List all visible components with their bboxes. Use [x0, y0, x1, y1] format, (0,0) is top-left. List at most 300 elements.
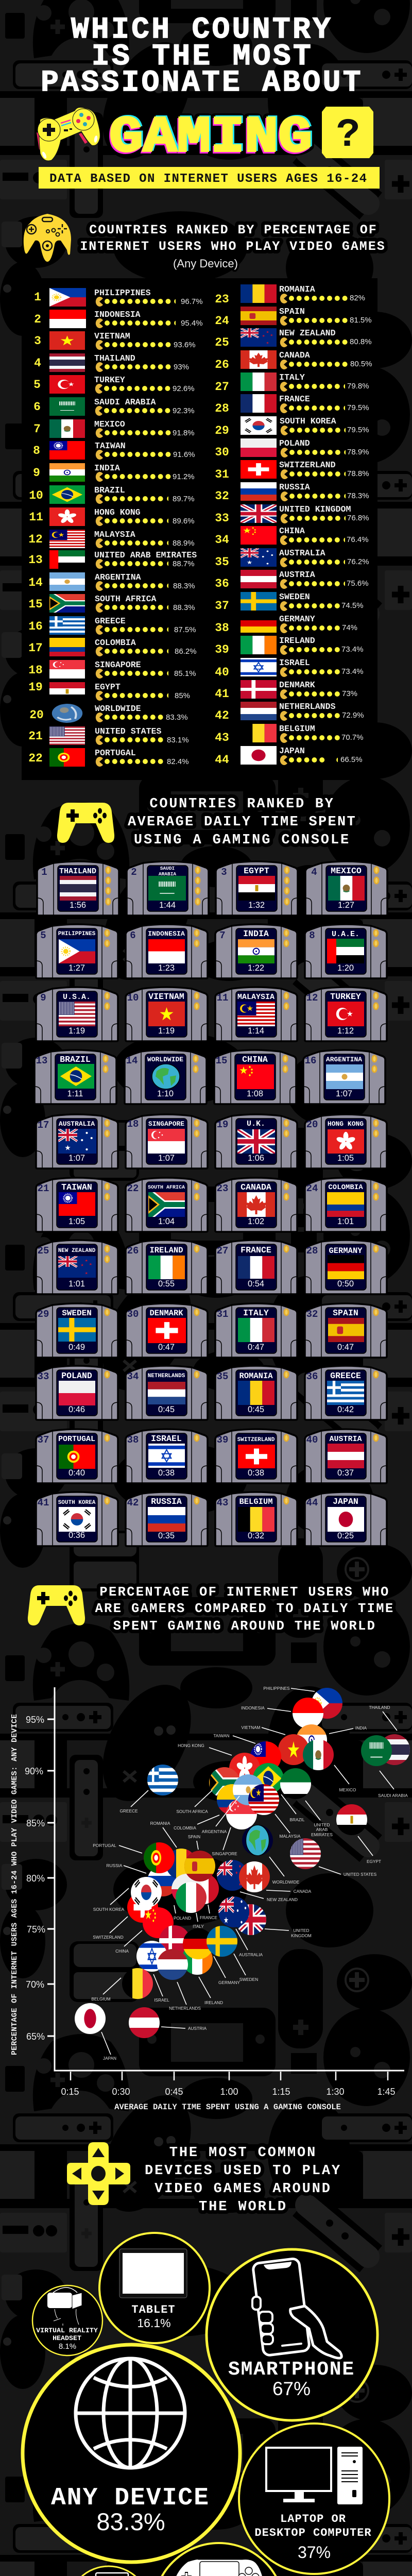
- country labels: SAUDI ARABIA: [378, 1793, 408, 1798]
- row 12 Malaysia: 12: [28, 533, 43, 546]
- row 21 United States: 21: [28, 730, 43, 743]
- cartridge 25 New Zealand: NEW ZEALAND: [58, 1248, 96, 1254]
- cartridge 17 Australia: AUSTRALIA: [59, 1120, 95, 1128]
- row 14 Argentina: ARGENTINA: [95, 572, 141, 582]
- cartridge 26 Ireland: IRELAND: [149, 1246, 183, 1255]
- title: WHICH COUNTRY: [71, 13, 333, 47]
- cartridge 9 U.S.A.: [36, 987, 118, 1041]
- row 42 Netherlands: 72.9%: [342, 711, 364, 720]
- row 22 Portugal: 22: [28, 752, 43, 765]
- row 9 India: [33, 463, 195, 482]
- row 4 Thailand: [34, 353, 189, 372]
- cartridge 23 Canada: [215, 1178, 297, 1232]
- row 19 Egypt: [28, 681, 190, 701]
- cartridge 43 Belgium: BELGIUM: [239, 1497, 273, 1506]
- cartridge 2 Saudi Arabia: 1:44: [159, 901, 176, 910]
- cartridge 10 Vietnam: [126, 987, 208, 1041]
- heading: most common devices: THE WORLD: [199, 2199, 287, 2215]
- cartridge 35 Romania: ROMANIA: [239, 1371, 273, 1381]
- row 14 Argentina: 14: [28, 576, 43, 589]
- row 42 Netherlands: 42: [215, 709, 229, 722]
- x axis ticks and labels: [61, 2072, 396, 2097]
- country labels: SWITZERLAND: [93, 1935, 124, 1940]
- cartridge 29 Sweden: [36, 1303, 118, 1358]
- cartridge 40 Austria: 0:37: [337, 1468, 354, 1478]
- bubble: VR headset: VIRTUAL REALITY: [36, 2327, 98, 2334]
- country labels: SWEDEN: [239, 1977, 258, 1982]
- row 40 Israel: ISRAEL: [279, 658, 310, 668]
- cartridge 4 Mexico: 4: [311, 867, 317, 878]
- banner: data based on internet users: DATA BASED ON INTERNET USERS AGES 16-24: [49, 172, 367, 186]
- bubble: any device: [23, 2345, 240, 2562]
- bubble: laptop or desktop computer: 37%: [298, 2543, 331, 2562]
- row 43 Belgium: 43: [215, 731, 229, 744]
- row 11 Hong Kong: 89.6%: [173, 517, 195, 526]
- cartridge 34 Netherlands: [126, 1366, 208, 1420]
- cartridge 13 Brazil: BRAZIL: [60, 1055, 91, 1064]
- cartridge 19 U.K.: U.K.: [247, 1120, 265, 1128]
- cartridge 42 Russia: 42: [127, 1497, 139, 1509]
- row 5 Turkey: 92.6%: [173, 384, 195, 393]
- row 11 Hong Kong: HONG KONG: [94, 507, 141, 517]
- x axis title: AVERAGE DAILY TIME SPENT USING A GAMING CONSOLE: [114, 2103, 341, 2112]
- word: GAMING: GAMING: [109, 109, 312, 166]
- row 3 Vietnam: 3: [34, 334, 41, 348]
- cartridge 6 Indonesia: 1:23: [158, 963, 175, 973]
- row 19 Egypt: EGYPT: [95, 682, 121, 692]
- title: IS THE MOST: [92, 40, 313, 74]
- cartridge 38 Israel: [126, 1429, 208, 1483]
- country labels: VIETNAM: [242, 1725, 261, 1730]
- row 31 Switzerland: 31: [215, 468, 229, 481]
- row 35 Australia: [215, 548, 369, 569]
- row 38 Germany: 38: [215, 621, 229, 635]
- cartridge 30 Denmark: [126, 1303, 208, 1358]
- row 30 Poland: 78.9%: [347, 448, 369, 456]
- row 1 Philippines: PHILIPPINES: [94, 288, 151, 298]
- country labels: HONG KONG: [178, 1743, 204, 1748]
- country labels: ROMANIA: [150, 1821, 170, 1826]
- country labels: THAILAND: [369, 1705, 390, 1710]
- cartridge 24 Colombia: 1:01: [337, 1217, 354, 1226]
- cartridge 12 Turkey: 12: [306, 992, 318, 1004]
- row 41 Denmark: 73%: [342, 689, 357, 698]
- cartridge 20 Hong Kong: HONG KONG: [328, 1120, 364, 1128]
- country labels: INDONESIA: [241, 1705, 265, 1710]
- row 17 Colombia: 86.2%: [175, 647, 197, 656]
- cartridge 38 Israel: 0:38: [158, 1468, 175, 1478]
- bubble: smartphone: 67%: [272, 2378, 311, 2399]
- row 16 Greece: [28, 616, 196, 635]
- row 43 Belgium: BELGIUM: [279, 724, 315, 734]
- bubble leader lines: [101, 1688, 397, 2055]
- heading: countries ranked by percentage: INTERNET USERS WHO PLAY VIDEO GAMES: [80, 239, 386, 254]
- cartridge 35 Romania: [215, 1366, 297, 1420]
- bubble: any device: 83.3%: [96, 2508, 165, 2535]
- cartridge 2 Saudi Arabia: 2: [131, 867, 137, 878]
- row 20 Worldwide: 83.3%: [166, 713, 188, 722]
- cartridge 44 Japan: JAPAN: [333, 1497, 358, 1506]
- cartridge 2 Saudi Arabia: ARABIA: [159, 871, 176, 877]
- row 44 Japan: 44: [215, 753, 229, 767]
- x axis ticks and labels: 1:00: [220, 2087, 238, 2097]
- y axis with ticks and labels: 70%: [26, 1979, 44, 1990]
- y axis with ticks and labels: 80%: [26, 1873, 45, 1884]
- country labels: [91, 1686, 408, 2061]
- cartridge 13 Brazil: 1:11: [67, 1089, 83, 1098]
- cartridge 32 Spain: SPAIN: [333, 1308, 358, 1318]
- row 25 New Zealand: 25: [215, 336, 229, 349]
- row 14 Argentina: [28, 572, 195, 591]
- heading: most common devices: [145, 2145, 341, 2215]
- row 10 Brazil: BRAZIL: [94, 485, 125, 495]
- bubble: gaming console: [153, 2543, 284, 2576]
- country labels: MEXICO: [339, 1787, 356, 1792]
- row 30 Poland: POLAND: [279, 438, 310, 448]
- cartridge 21 Taiwan: 1:05: [68, 1217, 85, 1226]
- country labels: KINGDOM: [291, 1933, 312, 1938]
- row 29 South Korea: 79.5%: [347, 426, 369, 434]
- cartridge 1 Thailand: 1: [41, 867, 47, 878]
- cartridge 41 South Korea: 41: [38, 1497, 49, 1509]
- cartridge 14 Worldwide: 14: [126, 1055, 138, 1066]
- cartridge 37 Portugal: 0:40: [68, 1468, 85, 1478]
- cartridge 22 South Africa: [126, 1178, 208, 1232]
- row 44 Japan: JAPAN: [279, 746, 305, 756]
- cartridge 5 Philippines: [36, 924, 118, 978]
- cartridge 28 Germany: 28: [306, 1245, 318, 1257]
- row 15 South Africa: [28, 594, 195, 613]
- row 9 India: 91.2%: [173, 472, 195, 481]
- cartridge 29 Sweden: 29: [38, 1309, 49, 1320]
- cartridge 23 Canada: CANADA: [241, 1182, 271, 1192]
- cartridge 11 Malaysia: 1:14: [248, 1026, 264, 1036]
- cartridge 3 Egypt: 3: [221, 867, 227, 878]
- row 4 Thailand: 93%: [174, 363, 189, 371]
- cartridge 38 Israel: 38: [127, 1434, 139, 1446]
- y axis with ticks and labels: 75%: [27, 1924, 45, 1935]
- row 19 Egypt: 85%: [175, 691, 190, 700]
- country labels: ARAB: [316, 1827, 328, 1832]
- row 18 Singapore: 85.1%: [174, 669, 196, 678]
- row 31 Switzerland: SWITZERLAND: [279, 460, 336, 470]
- cartridge 14 Worldwide: [125, 1050, 207, 1104]
- row 8 Taiwan: [33, 441, 195, 460]
- cartridge 28 Germany: GERMANY: [329, 1246, 363, 1256]
- cartridge 44 Japan: 44: [306, 1497, 318, 1509]
- cartridge 26 Ireland: 0:55: [158, 1279, 175, 1289]
- row 3 Vietnam: VIETNAM: [94, 331, 130, 341]
- cartridge 39 Switzerland: [215, 1429, 297, 1483]
- country labels: AUSTRIA: [188, 2026, 207, 2031]
- country labels: NEW ZEALAND: [267, 1897, 298, 1902]
- row 21 United States: 83.1%: [167, 736, 189, 744]
- row 28 France: FRANCE: [279, 394, 310, 404]
- country labels: IRELAND: [204, 2000, 223, 2005]
- country labels: MALAYSIA: [280, 1834, 301, 1839]
- heading: ranked by average daily time: AVERAGE DAILY TIME SPENT: [128, 815, 356, 830]
- cartridge 25 New Zealand: 1:01: [68, 1279, 85, 1289]
- row 32 Russia: [215, 482, 369, 503]
- row 38 Germany: GERMANY: [279, 614, 315, 624]
- cartridge 3 Egypt: 1:32: [248, 901, 265, 910]
- bubble: media streaming service: [68, 2566, 149, 2576]
- row 10 Brazil: 10: [29, 489, 43, 502]
- country labels: SINGAPORE: [212, 1851, 237, 1856]
- row 6 Saudi Arabia: [33, 397, 195, 416]
- row 26 Canada: CANADA: [279, 350, 310, 360]
- cartridge 40 Austria: [305, 1429, 387, 1483]
- row 13 UAE: 13: [28, 553, 43, 567]
- row 26 Canada: 26: [215, 358, 229, 371]
- row 5 Turkey: [33, 375, 195, 394]
- flag bubbles: [75, 1688, 410, 2038]
- cartridge 17 Australia: 1:07: [68, 1154, 85, 1163]
- cartridge 23 Canada: 1:02: [248, 1217, 264, 1226]
- cartridge 31 Italy: [215, 1303, 297, 1358]
- row 8 Taiwan: 8: [33, 444, 40, 457]
- cartridge 14 Worldwide: WORLDWIDE: [147, 1056, 183, 1063]
- cartridge 24 Colombia: [305, 1178, 387, 1232]
- title: [41, 13, 363, 100]
- cartridge 34 Netherlands: 0:45: [158, 1405, 175, 1414]
- heading: ranked by average daily time: [128, 796, 356, 848]
- row 36 Austria: 36: [215, 577, 229, 590]
- y axis with ticks and labels: 85%: [26, 1818, 45, 1828]
- row 34 China: CHINA: [279, 526, 305, 536]
- question mark box: [322, 107, 373, 158]
- cartridge 14 Worldwide: 1:10: [157, 1089, 174, 1098]
- row 8 Taiwan: 91.6%: [173, 450, 195, 459]
- row 36 Austria: AUSTRIA: [279, 570, 315, 580]
- country labels: ISRAEL: [154, 1997, 169, 2003]
- row 24 Spain: 81.5%: [350, 316, 372, 325]
- row 2 Indonesia: 95.4%: [181, 319, 203, 328]
- cartridge 5 Philippines: 1:27: [68, 963, 85, 973]
- row 26 Canada: 80.5%: [350, 360, 372, 368]
- row 12 Malaysia: 88.9%: [173, 539, 195, 548]
- cartridge 34 Netherlands: 34: [127, 1371, 139, 1382]
- row 29 South Korea: 29: [215, 424, 229, 437]
- cartridge 33 Poland: 0:46: [68, 1405, 85, 1414]
- cartridge 15 China: 15: [216, 1055, 227, 1066]
- row 35 Australia: 76.2%: [347, 557, 369, 566]
- cartridge 42 Russia: [126, 1492, 208, 1546]
- scatter chart: gamers vs daily time: [10, 1686, 410, 2112]
- cartridge 11 Malaysia: 11: [217, 992, 228, 1004]
- cartridge 9 U.S.A.: 9: [40, 992, 46, 1004]
- row 20 Worldwide: [29, 704, 188, 723]
- cartridge 41 South Korea: 0:36: [68, 1531, 85, 1540]
- bubble: VR headset: [32, 2285, 102, 2355]
- cartridge 17 Australia: [36, 1114, 118, 1168]
- country labels: SPAIN: [188, 1834, 200, 1839]
- x axis ticks and labels: 0:45: [165, 2087, 183, 2097]
- row 27 Italy: 79.8%: [347, 382, 369, 391]
- cartridge 13 Brazil: [35, 1050, 116, 1104]
- row 17 Colombia: COLOMBIA: [95, 638, 136, 648]
- row 16 Greece: GREECE: [95, 616, 126, 626]
- row 33 United Kingdom: 33: [215, 512, 229, 525]
- heading: ranked by average daily time: COUNTRIES RANKED BY: [149, 796, 335, 812]
- cartridge 1 Thailand: [37, 861, 119, 916]
- row 24 Spain: 24: [215, 314, 229, 328]
- cartridge 19 U.K.: 19: [217, 1119, 228, 1130]
- bubble: tablet: TABLET: [131, 2303, 176, 2316]
- row 17 Colombia: [28, 638, 197, 656]
- cartridge 20 Hong Kong: [305, 1114, 387, 1168]
- row 33 United Kingdom: 76.8%: [347, 514, 369, 522]
- row 33 United Kingdom: UNITED KINGDOM: [279, 504, 351, 514]
- country labels: POLAND: [174, 1916, 191, 1921]
- country labels: UNITED: [314, 1822, 330, 1827]
- cartridge 8 U.A.E.: U.A.E.: [332, 930, 359, 939]
- cartridge 41 South Korea: SOUTH KOREA: [58, 1500, 96, 1506]
- cartridge 30 Denmark: 30: [127, 1309, 139, 1320]
- row 39 Ireland: 73.4%: [341, 645, 364, 654]
- country labels: ITALY: [193, 1924, 204, 1929]
- heading: countries ranked by percentage: (Any Device): [173, 257, 238, 270]
- cartridge 30 Denmark: 0:47: [158, 1343, 175, 1352]
- country labels: CANADA: [294, 1889, 312, 1894]
- cartridge 6 Indonesia: INDONESIA: [148, 930, 185, 938]
- cartridge 7 India: INDIA: [243, 929, 269, 939]
- country labels: PHILIPPINES: [263, 1686, 290, 1691]
- cartridge 22 South Africa: SOUTH AFRICA: [148, 1185, 185, 1191]
- cartridge 25 New Zealand: [36, 1240, 118, 1294]
- cartridge 31 Italy: ITALY: [243, 1308, 269, 1318]
- icon: yellow gamepad: [57, 803, 114, 843]
- cartridge 15 China: 1:08: [247, 1089, 263, 1098]
- row 12 Malaysia: MALAYSIA: [94, 530, 135, 539]
- row 23 Romania: [215, 284, 365, 306]
- cartridge 12 Turkey: TURKEY: [330, 992, 361, 1002]
- country labels: GREECE: [119, 1808, 138, 1814]
- row 30 Poland: [215, 438, 369, 459]
- y axis with ticks and labels: 65%: [26, 2031, 45, 2042]
- row 20 Worldwide: WORLDWIDE: [95, 704, 141, 714]
- cartridge 22 South Africa: 1:04: [158, 1217, 175, 1226]
- cartridge 5 Philippines: 5: [40, 930, 46, 941]
- country labels: GERMANY: [218, 1980, 240, 1985]
- row 38 Germany: 74%: [342, 623, 357, 632]
- x axis ticks and labels: 0:30: [112, 2087, 130, 2097]
- cartridge 15 China: [214, 1050, 296, 1104]
- cartridge 6 Indonesia: [126, 924, 208, 978]
- row 18 Singapore: SINGAPORE: [95, 660, 141, 670]
- row 1 Philippines: 1: [34, 291, 41, 304]
- row 15 South Africa: SOUTH AFRICA: [95, 594, 157, 604]
- cartridge 32 Spain: 32: [306, 1309, 318, 1320]
- cartridge 8 U.A.E.: [305, 924, 387, 978]
- country labels: TAIWAN: [213, 1733, 230, 1738]
- row 43 Belgium: [215, 724, 364, 744]
- row 22 Portugal: 82.4%: [167, 757, 189, 766]
- cartridge 35 Romania: 35: [217, 1371, 228, 1382]
- cartridge 25 New Zealand: 25: [38, 1245, 49, 1257]
- row 30 Poland: 30: [215, 446, 229, 459]
- row 21 United States: UNITED STATES: [95, 726, 161, 736]
- row 13 UAE: 88.7%: [173, 560, 195, 568]
- row 23 Romania: 23: [215, 293, 229, 306]
- row 37 Sweden: 37: [215, 599, 229, 613]
- cartridge 33 Poland: 33: [38, 1371, 49, 1382]
- row 41 Denmark: DENMARK: [279, 680, 315, 690]
- row 7 Mexico: [33, 419, 195, 438]
- row 10 Brazil: [29, 485, 195, 504]
- cartridge 22 South Africa: 22: [127, 1183, 139, 1194]
- cartridge 7 India: 7: [219, 930, 226, 941]
- row 19 Egypt: 19: [28, 681, 43, 694]
- x axis ticks and labels: 1:30: [326, 2087, 345, 2097]
- row 24 Spain: SPAIN: [279, 307, 305, 316]
- cartridge 42 Russia: 0:35: [158, 1531, 175, 1540]
- row 4 Thailand: THAILAND: [94, 353, 135, 363]
- word: GAMING: GAMING: [109, 109, 312, 166]
- cartridge 20 Hong Kong: 1:05: [337, 1154, 354, 1163]
- bubble: smartphone: SMARTPHONE: [228, 2359, 355, 2381]
- cartridge 2 Saudi Arabia: [127, 861, 209, 916]
- row 3 Vietnam: 93.6%: [174, 341, 196, 349]
- row 1 Philippines: [34, 288, 203, 307]
- cartridge 24 Colombia: COLOMBIA: [328, 1183, 363, 1192]
- row 42 Netherlands: NETHERLANDS: [279, 702, 336, 711]
- heading: most common devices: DEVICES USED TO PLAY: [145, 2163, 341, 2179]
- cartridge 39 Switzerland: 0:38: [248, 1468, 264, 1478]
- country labels: BRAZIL: [289, 1817, 305, 1822]
- cartridge 19 U.K.: 1:06: [248, 1154, 264, 1163]
- row 11 Hong Kong: 11: [29, 511, 43, 524]
- row 36 Austria: 75.6%: [347, 579, 369, 588]
- row 10 Brazil: 89.7%: [173, 495, 195, 503]
- row 28 France: 79.5%: [347, 403, 369, 412]
- y axis title: PERCENTAGE OF INTERNET USERS AGES 16-24 WHO PLAY VIDEO GAMES: ANY DEVICE: [10, 1714, 19, 2055]
- row 7 Mexico: MEXICO: [94, 419, 125, 429]
- country labels: EGYPT: [367, 1859, 381, 1864]
- cartridge 3 Egypt: EGYPT: [244, 866, 269, 876]
- y axis with ticks and labels: [25, 1687, 404, 2071]
- cartridge 20 Hong Kong: 20: [306, 1119, 318, 1130]
- cartridge 9 U.S.A.: U.S.A.: [63, 993, 91, 1002]
- cartridge 10 Vietnam: 10: [127, 992, 139, 1004]
- country labels: NETHERLANDS: [169, 2006, 201, 2011]
- cartridge 18 Singapore: 1:07: [158, 1154, 175, 1163]
- row 1 Philippines: 96.7%: [181, 297, 203, 306]
- cartridge 5 Philippines: PHILIPPINES: [58, 931, 96, 937]
- cartridge 40 Austria: AUSTRIA: [329, 1435, 362, 1444]
- row 2 Indonesia: [34, 310, 203, 328]
- cartridge 23 Canada: 23: [217, 1183, 228, 1194]
- row 29 South Korea: SOUTH KOREA: [280, 416, 336, 426]
- cartridge 41 South Korea: [36, 1492, 118, 1546]
- row 44 Japan: [215, 746, 363, 767]
- cartridge 43 Belgium: 43: [217, 1497, 228, 1509]
- x axis ticks and labels: 1:45: [377, 2087, 396, 2097]
- row 3 Vietnam: [34, 331, 196, 350]
- y axis with ticks and labels: 90%: [25, 1766, 43, 1776]
- x axis ticks and labels: 1:15: [272, 2087, 290, 2097]
- country labels: UNITED STATES: [344, 1872, 377, 1877]
- country labels: JAPAN: [103, 2056, 116, 2061]
- row 9 India: 9: [33, 466, 40, 480]
- row 41 Denmark: 41: [215, 687, 229, 701]
- row 40 Israel: 73.4%: [341, 667, 364, 676]
- row 39 Ireland: 39: [215, 643, 229, 656]
- row 35 Australia: 35: [215, 555, 229, 569]
- cartridge 27 France: 27: [217, 1245, 228, 1257]
- cartridge 9 U.S.A.: 1:19: [68, 1026, 85, 1036]
- row 6 Saudi Arabia: 92.3%: [173, 406, 195, 415]
